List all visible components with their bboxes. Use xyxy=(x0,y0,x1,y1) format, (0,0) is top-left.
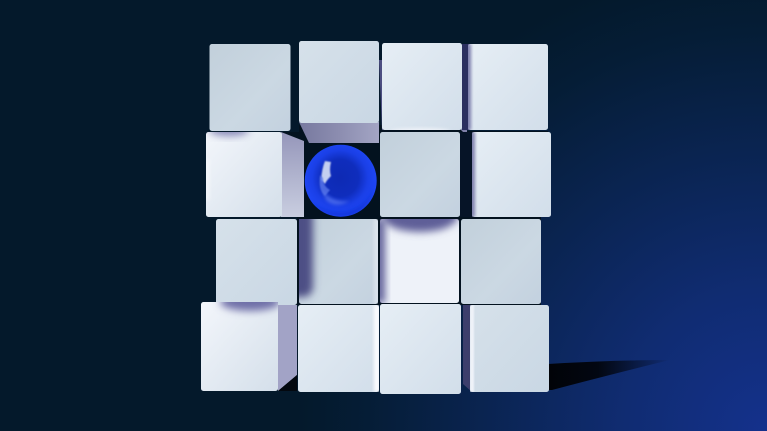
sphere highlights xyxy=(321,161,331,184)
cube row 3 column 4 xyxy=(461,219,541,304)
cube row 1 column 1 xyxy=(210,44,290,131)
dark recess behind the cubes xyxy=(278,125,548,391)
cube row 3 column 2 xyxy=(299,219,378,304)
cube row 1 column 2 xyxy=(299,41,379,143)
cube row 1 column 4 xyxy=(462,44,548,130)
cube row 3 column 1 xyxy=(216,219,297,305)
cube row 1 column 3 xyxy=(379,43,467,136)
illustration: white cubes with a blue sphere xyxy=(201,13,767,431)
cube row 4 column 3 xyxy=(380,304,461,394)
cube row 4 column 2 xyxy=(298,305,380,392)
cube row 2 column 1 xyxy=(206,132,304,217)
blue sphere xyxy=(305,145,377,217)
cube row 4 column 1 xyxy=(201,293,297,391)
cube row 3 column 3 xyxy=(380,219,459,303)
cube row 2 column 4 xyxy=(460,132,551,217)
cube row 4 column 4 xyxy=(463,305,549,392)
cube row 2 column 3 xyxy=(380,132,460,217)
floor shadow xyxy=(545,360,670,390)
